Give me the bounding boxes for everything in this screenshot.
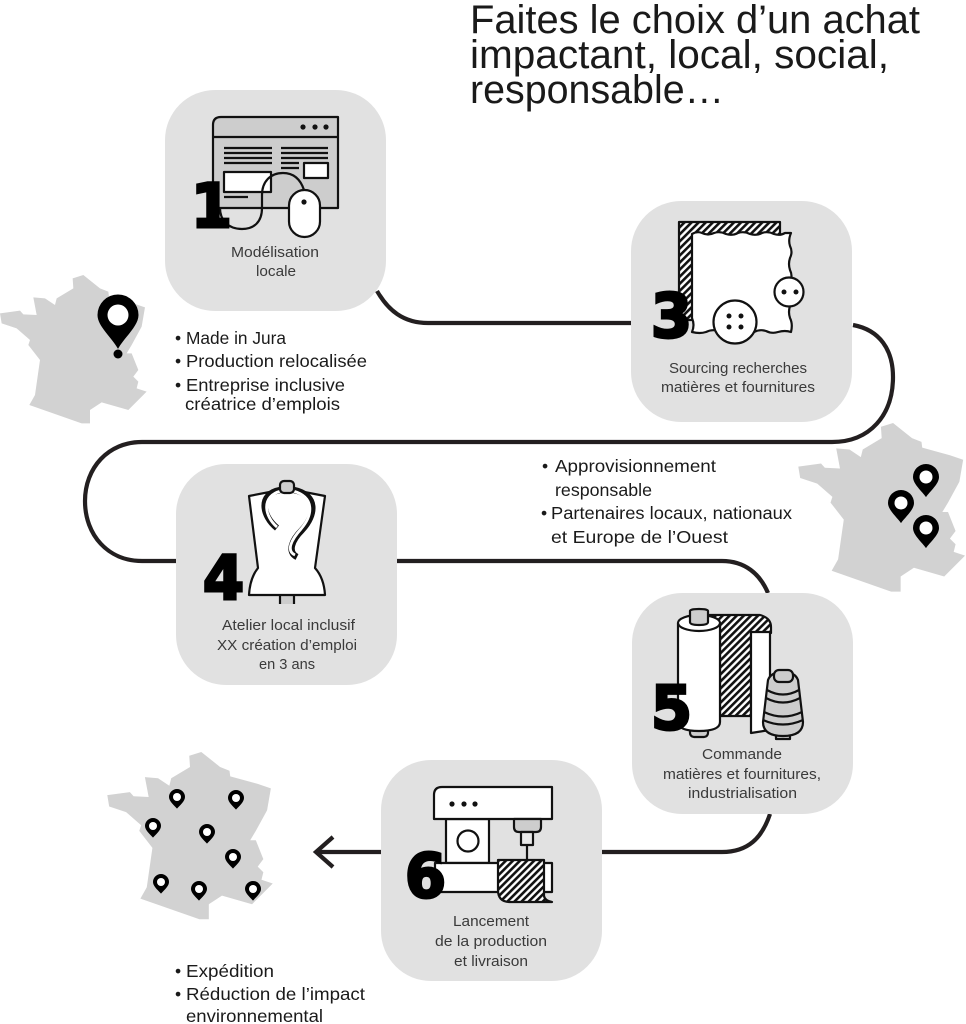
text block: shipping: Expédition [186, 961, 274, 981]
process path connecting steps [85, 291, 893, 852]
label: step 6: et livraison [454, 953, 528, 970]
icon: eight location pins [145, 789, 261, 901]
number 4: 4 [203, 543, 244, 614]
icon: browser window and mouse [213, 117, 338, 237]
map: France with Jura pin [0, 275, 147, 423]
text block: local production benefits: Entreprise inclusive [186, 375, 345, 395]
text block: responsible sourcing: Approvisionnement [555, 456, 716, 476]
label: step 5: Commande [702, 746, 782, 763]
text block: local production benefits: Production relocalisée [186, 351, 367, 371]
text block: local production benefits: Made in Jura [186, 328, 286, 348]
panel: step 1 modelling [165, 90, 386, 311]
text block: responsible sourcing: et Europe de l’Ouest [551, 527, 728, 547]
label: step 1 [231, 244, 319, 280]
text block: shipping: • [175, 984, 181, 1004]
number 3: 3 [651, 281, 692, 352]
label: step 6: Lancement [453, 913, 530, 930]
panel: step 3 sourcing [631, 201, 852, 422]
label: step 5: matières et fournitures, [663, 766, 821, 783]
label: step 4: en 3 ans [259, 656, 315, 673]
label: step 3: Sourcing recherches [669, 360, 807, 377]
panel: step 5 materials [632, 593, 853, 814]
text block: local production benefits: • [175, 351, 181, 371]
number 1: 1 [191, 171, 232, 242]
text block: local production benefits: créatrice d’emplois [185, 394, 340, 414]
icon: fabric swatch and buttons [679, 222, 804, 344]
title: impactant, local, social, [470, 33, 889, 77]
label: step 4 [217, 617, 357, 673]
text block: local production benefits: • [175, 375, 181, 395]
number 6: 6 [405, 841, 446, 912]
label: step 1: Modélisation [231, 244, 319, 261]
map: France with delivery pins [107, 752, 273, 919]
map: France with three supplier pins [798, 423, 965, 592]
text block: shipping [175, 961, 365, 1024]
icon: dress form with tape measure [249, 481, 325, 604]
icon: fabric roll and thread spool [678, 609, 803, 739]
text block: local production benefits [175, 328, 367, 414]
text block: responsible sourcing: • [541, 503, 547, 523]
label: step 5 [663, 746, 821, 802]
label: step 6: de la production [435, 933, 547, 950]
text block: responsible sourcing [541, 456, 792, 547]
icon: sewing machine [434, 787, 552, 902]
title [470, 0, 920, 112]
label: step 5: industrialisation [688, 785, 797, 802]
text block: responsible sourcing: • [542, 456, 548, 476]
text block: local production benefits: • [175, 328, 181, 348]
panel: step 6 production [381, 760, 602, 981]
label: step 3 [661, 360, 815, 396]
text block: shipping: • [175, 961, 181, 981]
text block: responsible sourcing: responsable [555, 480, 652, 500]
label: step 1: locale [256, 263, 296, 280]
arrow to delivery map [316, 837, 381, 867]
label: step 4: Atelier local inclusif [222, 617, 356, 634]
label: step 3: matières et fournitures [661, 379, 815, 396]
icon: three location pins [888, 464, 939, 548]
title: responsable… [470, 68, 724, 112]
label: step 6 [435, 913, 547, 970]
panel: step 4 workshop [176, 464, 397, 685]
number 5: 5 [651, 673, 692, 744]
label: step 4: XX création d’emploi [217, 637, 357, 654]
text block: responsible sourcing: Partenaires locaux, nationaux [551, 503, 792, 523]
text block: shipping: Réduction de l’impact [186, 984, 365, 1004]
icon: large location pin [98, 294, 138, 358]
